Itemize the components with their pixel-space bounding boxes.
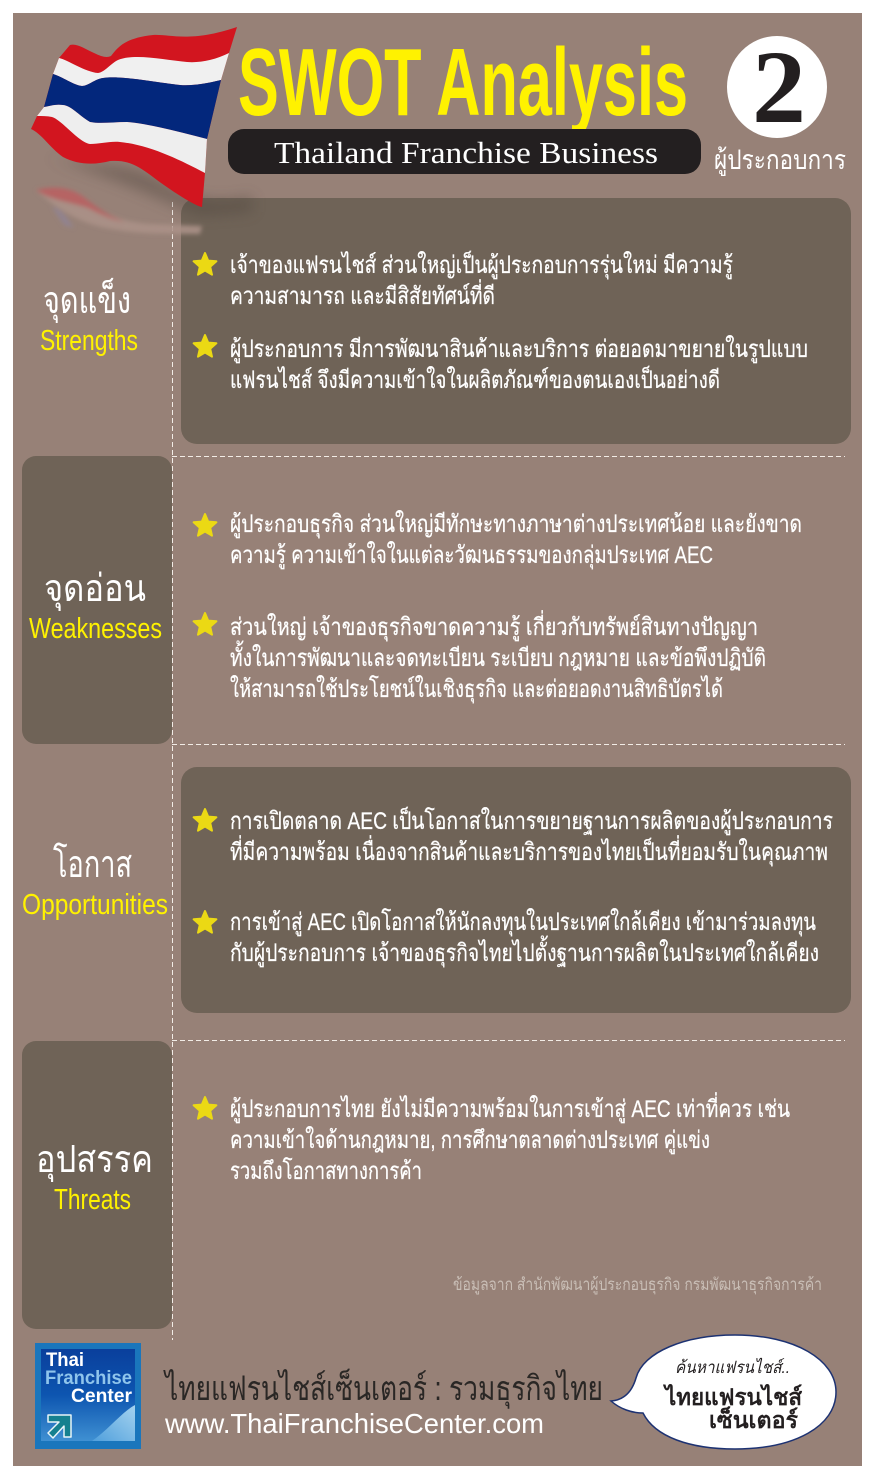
panel: weaknesses label background [22, 456, 172, 744]
subtitle banner [228, 129, 701, 174]
heading: strengths: Strengths [40, 325, 138, 357]
panel: threats label background [22, 1041, 172, 1329]
heading: strengths [40, 277, 138, 357]
heading: opportunities [22, 842, 168, 921]
icon: arrow [48, 1415, 71, 1438]
text block: weaknesses: ให้สามารถใช้ประโยชน์ในเชิงธุรกิจ และต่อยอดงานสิทธิบัตรได้ [230, 675, 723, 704]
heading: strengths: จุดแข็ง [43, 277, 131, 323]
label: entrepreneur: ผู้ประกอบการ [714, 145, 846, 176]
logo: Thai Franchise Center: Center [71, 1386, 133, 1407]
icon: Thai flag with shadow and reflection [31, 27, 252, 234]
text block: strengths: เจ้าของแฟรนไชส์ ส่วนใหญ่เป็นผู้ประกอบการรุ่นใหม่ มีความรู้ [230, 250, 733, 280]
panel: strengths background [181, 198, 851, 444]
text block: weaknesses [194, 510, 802, 704]
text block: opportunities [194, 806, 833, 968]
heading: opportunities: โอกาส [53, 842, 132, 886]
logo: Thai Franchise Center: Thai [46, 1350, 84, 1371]
text block: threats [194, 1092, 790, 1185]
text block: threats: รวมถึงโอกาสทางการค้า [230, 1157, 422, 1185]
text block: weaknesses: ความรู้ ความเข้าใจในแต่ละวัฒนธรรมของกลุ่มประเทศ AEC [230, 541, 713, 570]
text block: weaknesses: ส่วนใหญ่ เจ้าของธุรกิจขาดความรู้ เกี่ยวกับทรัพย์สินทางปัญญา [230, 610, 758, 642]
badge: number 2: 2 [752, 30, 806, 145]
heading: opportunities: Opportunities [22, 889, 168, 921]
badge: number 2 [727, 30, 827, 145]
heading: threats: Threats [54, 1184, 131, 1216]
logo: Thai Franchise Center [35, 1343, 141, 1449]
logo: Thai Franchise Center: Franchise [45, 1368, 132, 1389]
icon: star [194, 1097, 216, 1119]
callout: speech bubble: เซ็นเตอร์ [709, 1405, 799, 1433]
text block: strengths: แฟรนไชส์ จึงมีความเข้าใจในผลิตภัณฑ์ของตนเองเป็นอย่างดี [230, 365, 720, 394]
callout: speech bubble [611, 1335, 836, 1449]
icon: star [194, 514, 216, 536]
footer tagline: ไทยแฟรนไชส์เซ็นเตอร์ : รวมธุรกิจไทย [163, 1368, 603, 1409]
footer url: www.ThaiFranchiseCenter.com [164, 1408, 544, 1439]
icon: star [194, 911, 216, 933]
subtitle banner: Thailand Franchise Business [274, 135, 658, 170]
heading: threats [36, 1139, 153, 1216]
callout: speech bubble: ไทยแฟรนไชส์ [662, 1383, 803, 1410]
text block: strengths [194, 250, 808, 394]
heading: weaknesses: Weaknesses [29, 613, 162, 645]
panel: opportunities background [181, 767, 851, 1013]
callout: speech bubble: ค้นหาแฟรนไชส์.. [675, 1357, 790, 1377]
icon: star [194, 613, 216, 635]
icon: star [194, 809, 216, 831]
heading: threats: อุปสรรค [36, 1139, 153, 1182]
text block: threats: ความเข้าใจด้านกฎหมาย, การศึกษาตลาดต่างประเทศ คู่แข่ง [230, 1126, 710, 1155]
heading: weaknesses: จุดอ่อน [44, 568, 146, 611]
icon: star [194, 335, 216, 357]
text block: strengths: ความสามารถ และมีสิสัยทัศน์ที่ดี [230, 279, 495, 310]
icon: star [194, 253, 216, 275]
heading: weaknesses [29, 568, 162, 645]
